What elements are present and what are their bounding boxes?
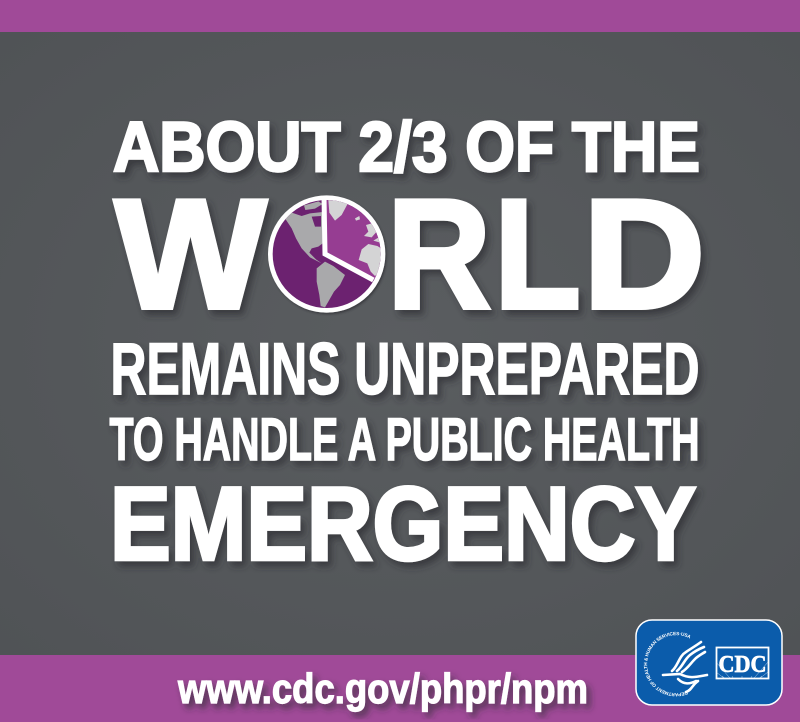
hhs eagle: [663, 642, 707, 692]
land: europe islands: [355, 216, 380, 242]
hudson bay: [312, 216, 321, 227]
clock wedge: [326, 200, 381, 280]
cdc box: [716, 648, 768, 678]
clock hands: [324, 197, 373, 280]
land: africa: [358, 244, 381, 276]
land: south america: [317, 262, 345, 307]
heading letter: L: L: [494, 168, 580, 340]
heading line: about 2/3 of the: ABOUT 2/3 OF THE: [113, 107, 700, 186]
hhs seal text: DEPARTMENT OF HEALTH & HUMAN SERVICES·USA: [644, 632, 690, 696]
land: arctic islands: [304, 201, 323, 210]
land: north america: [285, 212, 323, 263]
cdc rays: [717, 662, 768, 678]
land: greenland: [328, 200, 349, 221]
bottom purple band: [0, 655, 800, 722]
cdc letters: CDC: [718, 652, 766, 678]
heading letter: D: D: [583, 168, 705, 340]
heading line: emergency: EMERGENCY: [110, 466, 696, 582]
logo background: [636, 620, 782, 705]
top purple band: [0, 0, 800, 32]
heading letter: R: R: [388, 168, 490, 340]
logo: hhs and cdc: [635, 619, 783, 706]
icon: globe clock: [268, 193, 390, 313]
url: www.cdc.gov/phpr/npm: [177, 665, 588, 712]
headline: [110, 107, 705, 582]
heading letter: W: W: [115, 168, 267, 340]
